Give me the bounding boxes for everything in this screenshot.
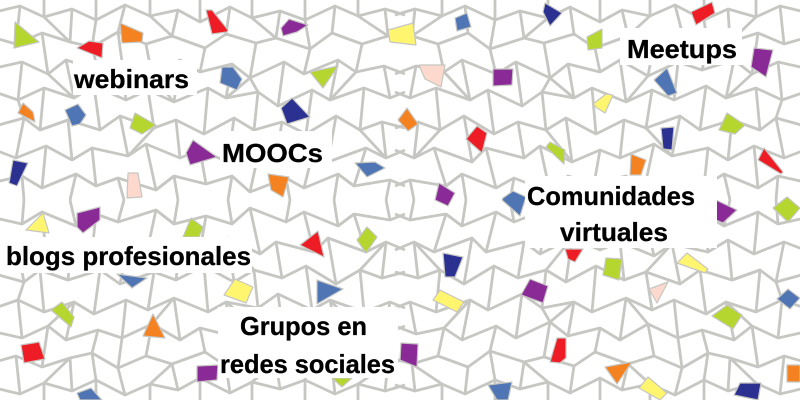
label: webinars: webinars (73, 64, 189, 94)
label: Comunidades virtuales (525, 176, 717, 248)
label: Meetups: Meetups (627, 34, 737, 64)
label: Comunidades virtuales: virtuales (560, 217, 668, 247)
label: blogs profesionales: blogs profesionales (6, 241, 251, 271)
label: Grupos en redes sociales (218, 307, 398, 379)
label: Comunidades virtuales: Comunidades (527, 181, 695, 211)
label: Grupos en redes sociales: Grupos en (240, 311, 367, 341)
label: Grupos en redes sociales: redes sociales (220, 349, 395, 379)
label: MOOCs: MOOCs (222, 138, 323, 168)
label: MOOCs (220, 131, 332, 168)
